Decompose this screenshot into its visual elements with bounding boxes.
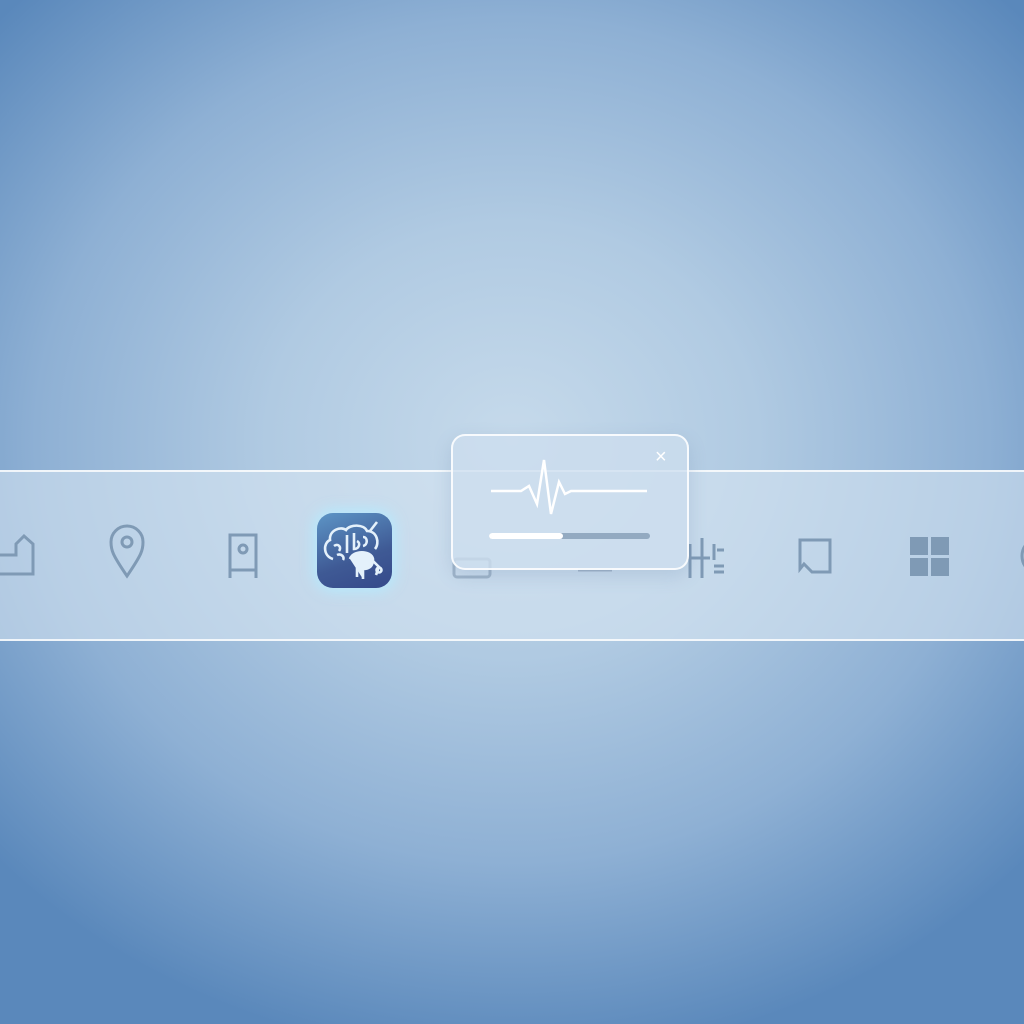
- progress bar: [489, 533, 650, 539]
- icon: location pin: [111, 526, 143, 576]
- icon: hidden box: [454, 559, 490, 577]
- icon: grid: [910, 537, 949, 576]
- icon: partial circle: [1022, 538, 1024, 574]
- icon set: [0, 524, 1024, 578]
- app icon: brain: [317, 513, 392, 588]
- icon: sliders: [687, 538, 724, 578]
- icon: chat bubble: [800, 540, 830, 572]
- popup: heartbeat card: [451, 434, 689, 570]
- icon: door: [230, 535, 256, 578]
- heartbeat line: [491, 460, 647, 514]
- icon bar: [0, 470, 1024, 641]
- close button: ×: [655, 446, 667, 468]
- icon: home partial: [0, 536, 33, 574]
- icon: hidden item: [578, 568, 612, 572]
